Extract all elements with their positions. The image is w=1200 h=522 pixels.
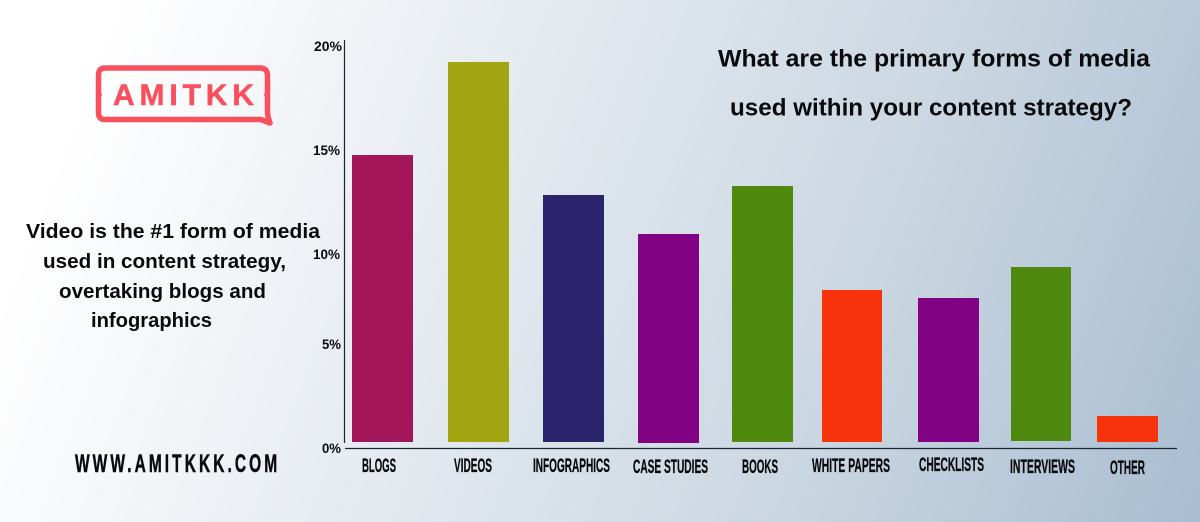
- category labels: BOOKS: [742, 457, 778, 478]
- category labels: CHECKLISTS: [919, 455, 984, 476]
- website address: WWW.AMITKKK.COM: [75, 450, 277, 478]
- side note: video is the number one form of media: Video is the #1 form of media: [26, 221, 321, 243]
- side note: video is the number one form of media: overtaking blogs and: [59, 281, 266, 303]
- chart title: used within your content strategy?: [730, 94, 1132, 122]
- y axis labels: 20%: [314, 38, 343, 54]
- category labels: VIDEOS: [454, 456, 492, 477]
- category labels: [362, 455, 1145, 479]
- category labels: CASE STUDIES: [633, 457, 708, 478]
- bars: [352, 62, 1158, 443]
- category labels: WHITE PAPERS: [812, 456, 890, 477]
- side note: video is the number one form of media: infographics: [91, 310, 212, 332]
- bar chart: [313, 38, 1177, 479]
- category labels: BLOGS: [362, 456, 396, 477]
- side note: video is the number one form of media: used in content strategy,: [43, 251, 286, 273]
- chart title: What are the primary forms of media: [718, 46, 1151, 72]
- y axis labels: 0%: [322, 440, 342, 456]
- side note: video is the number one form of media: [26, 221, 321, 332]
- category labels: INTERVIEWS: [1010, 457, 1075, 478]
- axes: [344, 40, 1177, 448]
- chart title: [718, 46, 1151, 122]
- y axis labels: [313, 38, 343, 456]
- logo: AMITKK speech bubble: [96, 68, 270, 123]
- logo: AMITKK speech bubble: AMITKK: [113, 79, 254, 112]
- category labels: OTHER: [1110, 458, 1145, 479]
- y axis labels: 15%: [313, 142, 341, 158]
- y axis labels: 10%: [313, 246, 341, 262]
- category labels: INFOGRAPHICS: [533, 456, 610, 477]
- y axis labels: 5%: [322, 336, 342, 352]
